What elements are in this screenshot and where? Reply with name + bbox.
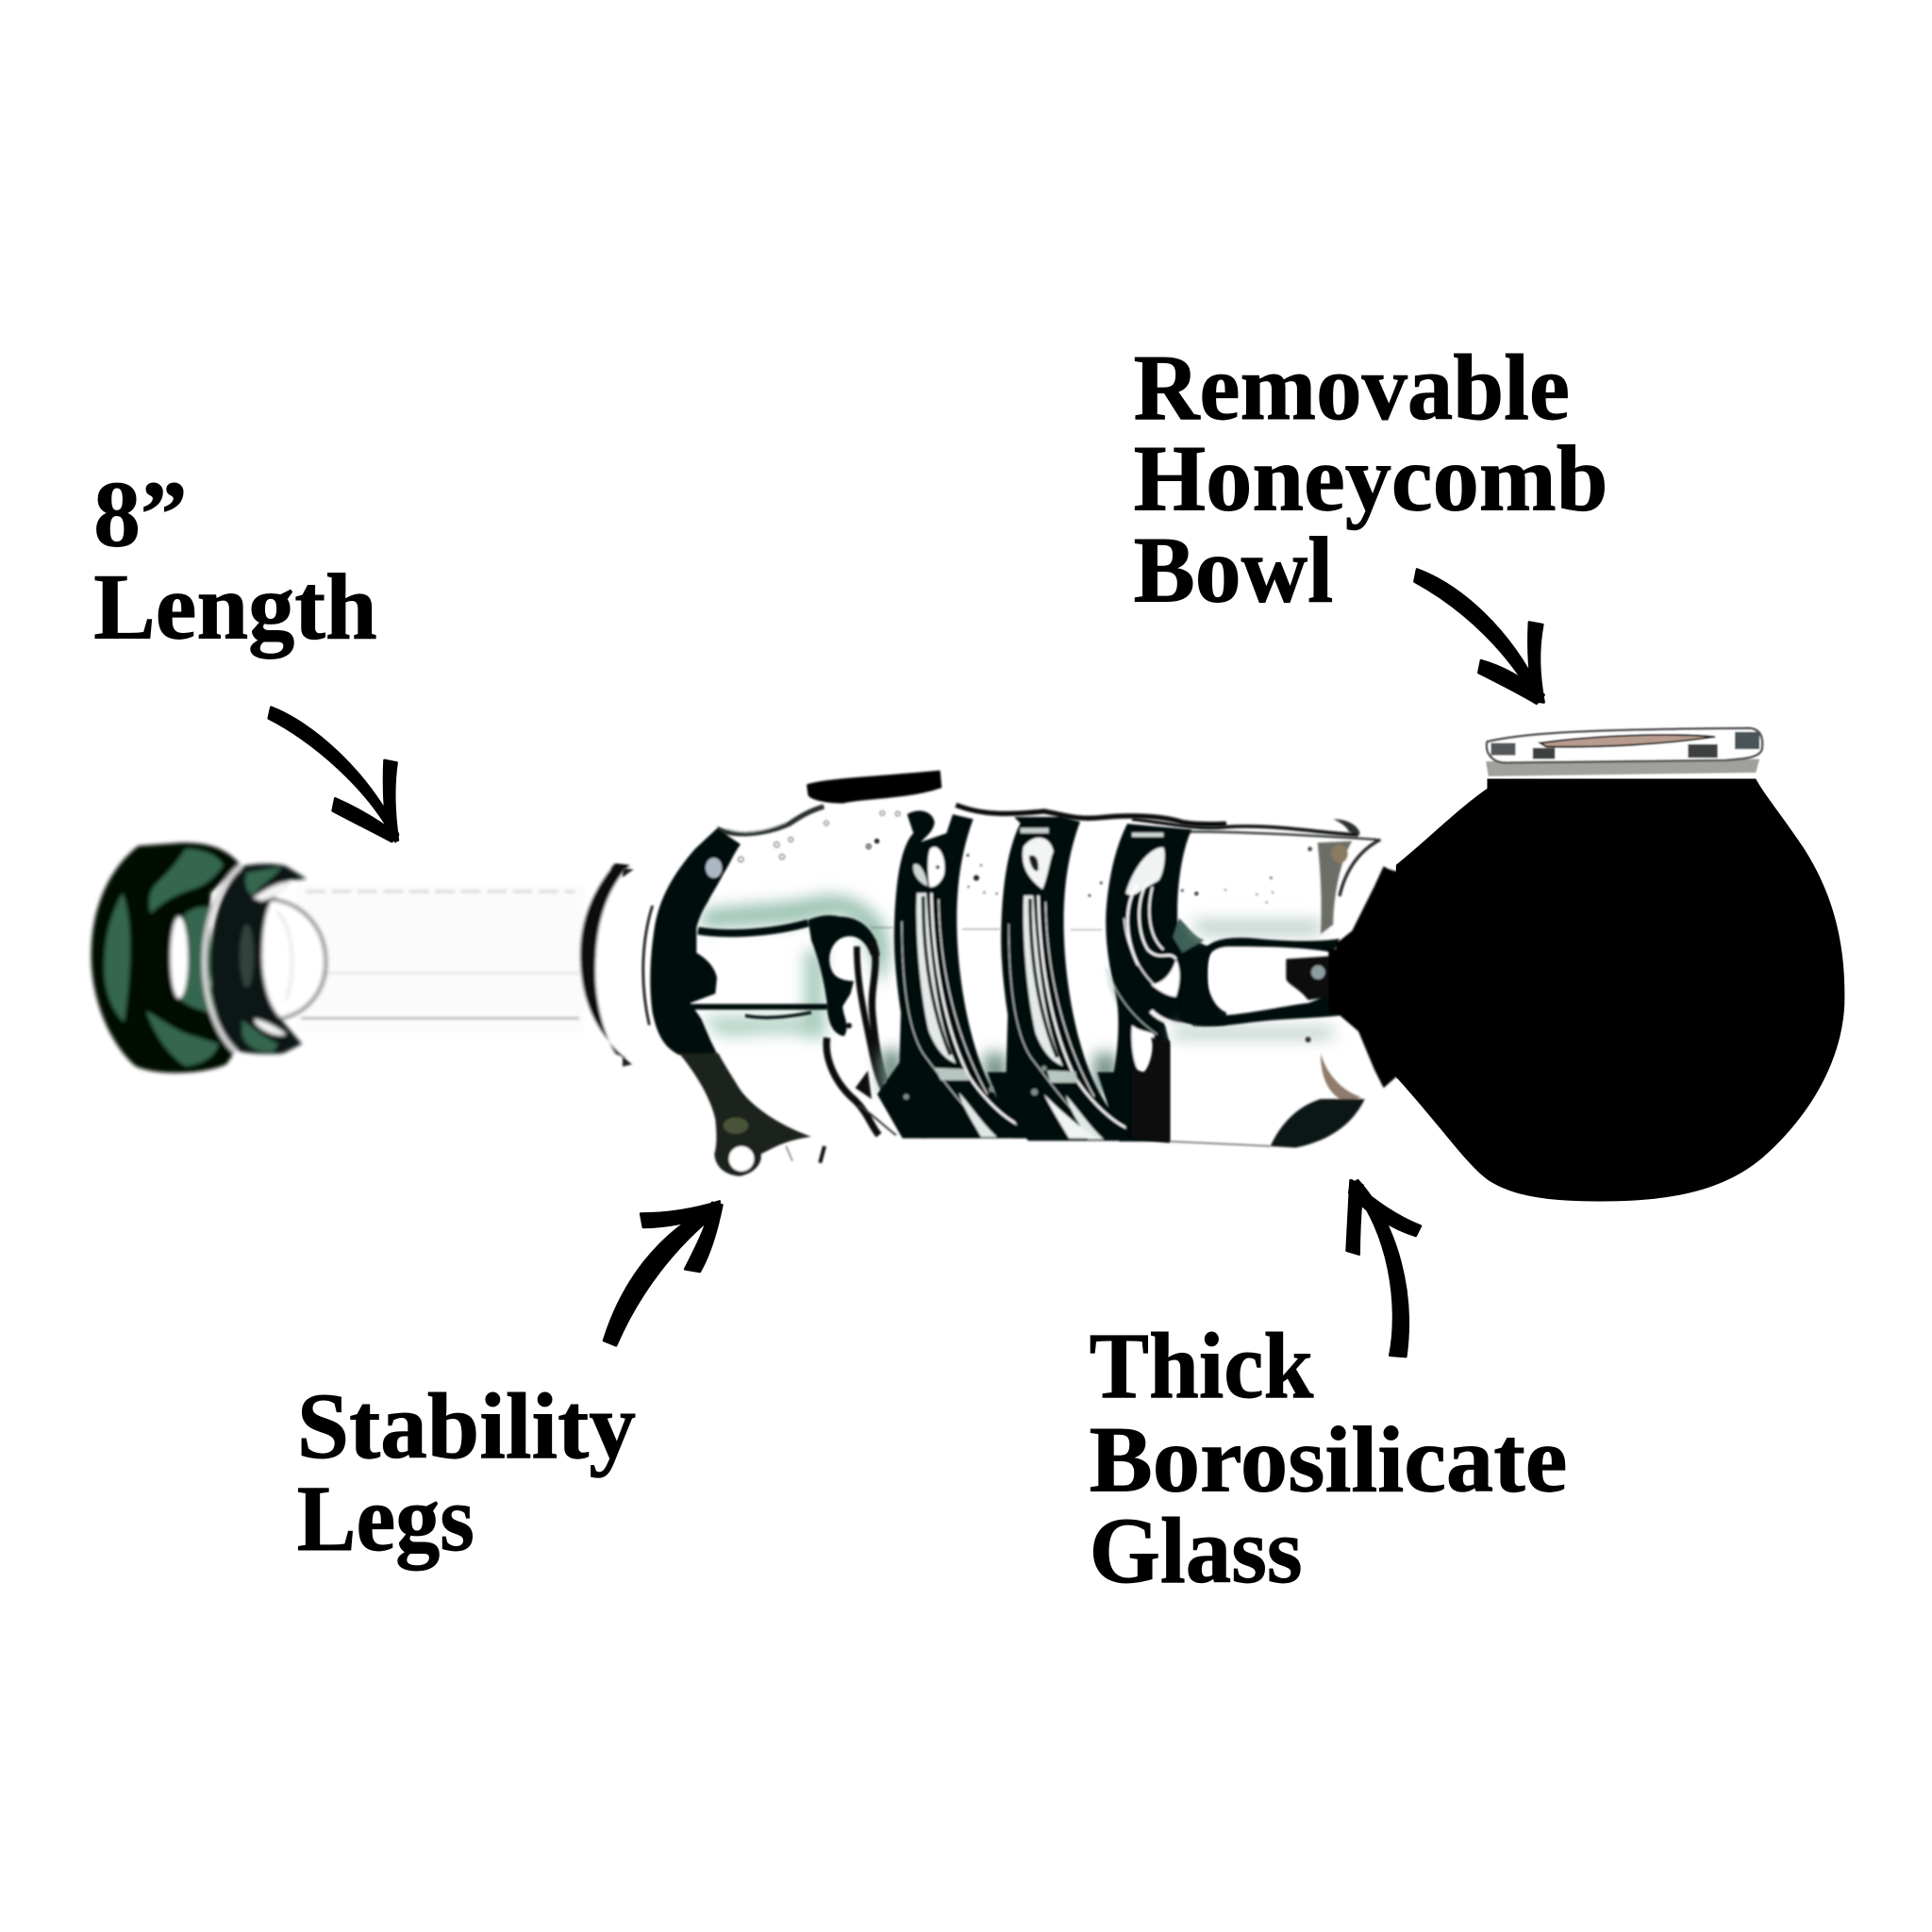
label: thick borosilicate glass: Borosilicate (1090, 1408, 1567, 1511)
small leg (820, 1146, 824, 1163)
glass tube and collar (296, 863, 660, 1059)
label: 8 inch length: 8” (93, 464, 188, 567)
arrow: points to stability legs (604, 1201, 722, 1345)
top edge (956, 805, 1226, 824)
label: thick borosilicate glass: Thick (1090, 1315, 1314, 1418)
label: thick borosilicate glass (1090, 1315, 1567, 1603)
neck (1333, 861, 1434, 1116)
label: 8 inch length: Length (93, 557, 377, 659)
body left section and stability legs (623, 771, 941, 1176)
right tube (1179, 938, 1340, 1026)
bowl rim (1486, 728, 1762, 776)
swirl shading (1106, 962, 1170, 1041)
junction loop (808, 915, 880, 1036)
tube lines (698, 923, 808, 933)
label: 8 inch length (93, 464, 377, 659)
label: removable honeycomb bowl: Honeycomb (1134, 428, 1607, 531)
label: removable honeycomb bowl: Bowl (1134, 519, 1333, 622)
bowl (1396, 728, 1844, 1201)
arrow: points to borosilicate glass (1347, 1180, 1421, 1357)
bubbles (936, 854, 1198, 897)
dark left band (650, 828, 741, 1055)
label: removable honeycomb bowl: Removable (1134, 337, 1570, 440)
label: thick borosilicate glass: Glass (1090, 1500, 1303, 1603)
lower dark (1132, 1038, 1170, 1143)
label: stability legs (297, 1375, 636, 1571)
label: stability legs: Legs (297, 1468, 475, 1571)
product: glass pipe (92, 728, 1844, 1201)
arrow: points to bowl (1414, 569, 1544, 704)
spiral three (1106, 824, 1226, 1141)
spiral two (1001, 817, 1144, 1141)
spiral one (894, 810, 1038, 1139)
bubbles (739, 811, 900, 862)
label: removable honeycomb bowl (1134, 337, 1607, 622)
black base of spirals (877, 1063, 1135, 1141)
body right section and neck (1132, 819, 1434, 1148)
label: stability legs: Stability (297, 1375, 636, 1478)
arrow: points to length (269, 708, 398, 841)
green glass shading (701, 894, 890, 1041)
body spiral section (867, 805, 1226, 1141)
mouthpiece (92, 842, 325, 1073)
cap (807, 771, 941, 804)
leg (679, 1054, 811, 1176)
